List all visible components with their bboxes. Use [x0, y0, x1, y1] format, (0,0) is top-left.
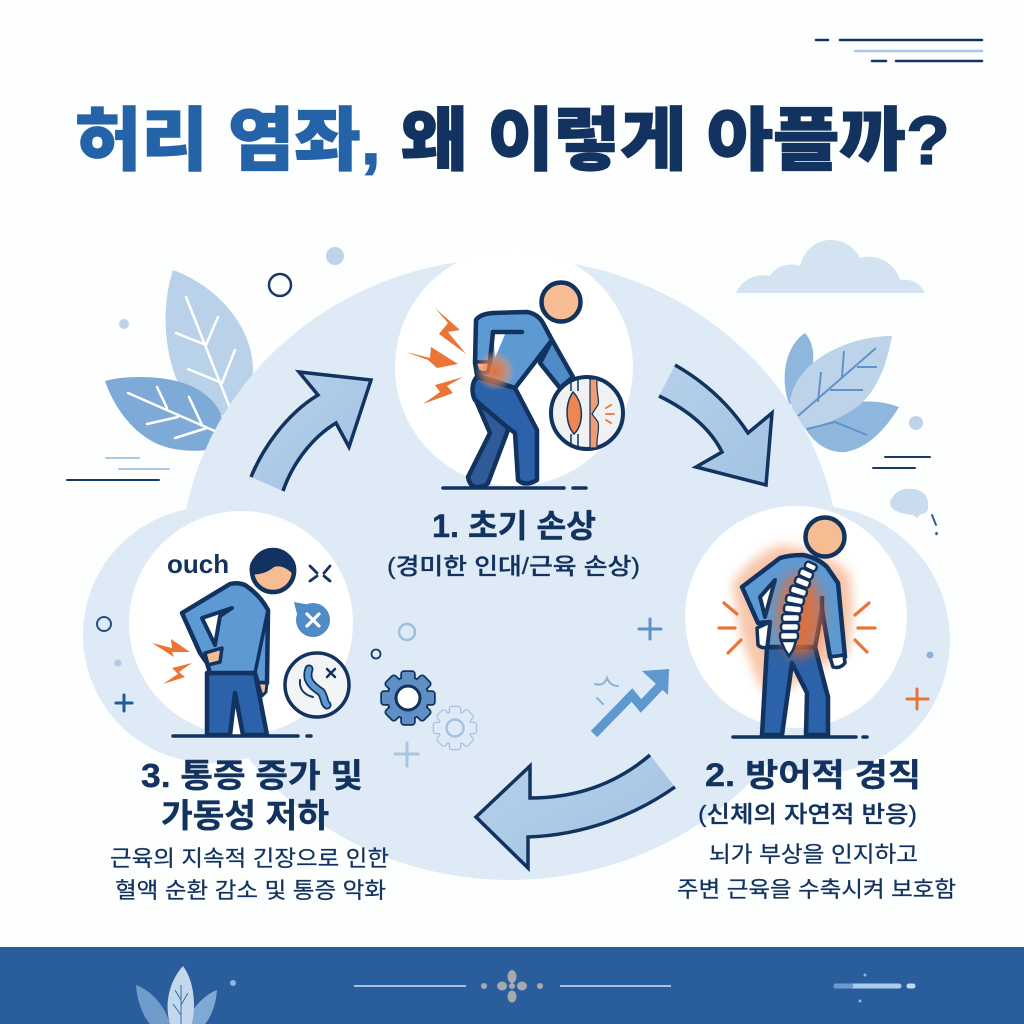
pants	[762, 647, 828, 735]
growth arrow	[594, 669, 669, 734]
lightning bolts 3	[152, 639, 192, 684]
torso and arms	[742, 555, 845, 657]
step 1 subtitle: (경미한 인대/근육 손상)	[387, 553, 640, 579]
front leg	[473, 377, 537, 484]
step 1 heading: 1. 초기 손상	[432, 508, 596, 544]
step 2 body line 1: 뇌가 부상을 인지하고	[709, 842, 918, 867]
figure 2: guarding	[719, 518, 875, 735]
step 3 body line 1: 근육의 지속적 긴장으로 인한	[110, 846, 389, 871]
back leg	[468, 400, 508, 487]
torso and arm	[182, 583, 268, 683]
ground line 2	[733, 735, 867, 739]
small brain cloud right	[890, 489, 936, 534]
stiff muscle badge	[285, 653, 349, 717]
dark gear	[382, 672, 434, 724]
step 3 heading line 1: 3. 통증 증가 및	[141, 757, 363, 794]
ouch label: ouch	[167, 549, 229, 579]
arrow: 1 to 2	[659, 365, 772, 485]
leaves right	[785, 333, 899, 452]
spine	[780, 561, 818, 656]
rear arm	[540, 340, 573, 388]
step 2 body line 2: 주변 근육을 수축시켜 보호함	[677, 877, 956, 902]
figure 3: reduced mobility	[152, 549, 349, 735]
figure 1: injury	[468, 282, 580, 487]
leaves top left	[105, 270, 253, 451]
x burst	[310, 566, 330, 581]
pain glow 1	[475, 351, 515, 391]
top right decorative lines	[816, 40, 982, 61]
head	[542, 282, 580, 322]
back inflammation	[778, 573, 822, 657]
step 3 heading line 2: 가동성 저하	[161, 797, 329, 834]
lightning bolts 1	[406, 308, 466, 404]
step 2 heading: 2. 방어적 경직	[705, 757, 921, 793]
white circles	[129, 248, 907, 735]
step 2 subtitle: (신체의 자연적 반응)	[698, 801, 917, 827]
footer ornament	[354, 970, 671, 1002]
footer leaf icon	[136, 966, 217, 1024]
title: 허리 염좌, 왜 이렇게 아플까?	[75, 102, 950, 179]
decorative dots and rings	[67, 247, 934, 766]
light gear	[434, 707, 476, 749]
arm line	[490, 332, 522, 362]
background cycle blob	[83, 258, 950, 880]
cloud top right	[736, 240, 925, 293]
torso	[475, 312, 552, 388]
magnifier: ligament tear	[551, 377, 623, 449]
arrow: 3 to 1	[251, 372, 371, 491]
arrow: 2 to 3	[476, 755, 675, 868]
guarding glow	[732, 545, 853, 700]
footer right dashes	[836, 974, 913, 1002]
x speech bubble	[294, 602, 330, 637]
gears	[382, 672, 476, 749]
hand	[475, 362, 490, 373]
footer band	[0, 947, 1024, 1024]
pants	[207, 673, 267, 735]
ground line 1	[443, 486, 586, 490]
step 3 body line 2: 혈액 순환 감소 및 통증 악화	[115, 878, 386, 903]
arm gap	[493, 332, 506, 358]
ground line 3	[173, 734, 311, 738]
